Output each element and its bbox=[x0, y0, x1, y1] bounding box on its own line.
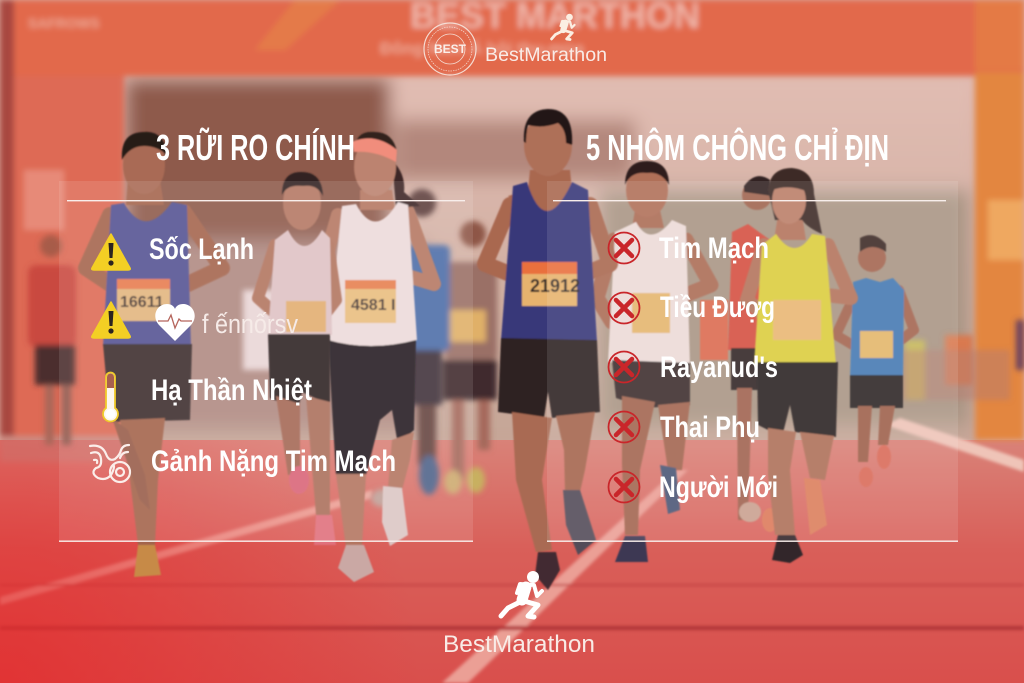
runner: white vest centre right bbox=[597, 161, 711, 562]
seal badge: BEST bbox=[434, 42, 467, 56]
icon: cross 3 bbox=[608, 352, 640, 382]
heading: contraindications: 5 NHÔM CHÔNG CHỈ ĐỊN bbox=[586, 126, 889, 168]
icon: heart with pulse bbox=[155, 304, 195, 341]
text: pregnancy: Thai Phụ bbox=[660, 411, 760, 444]
icon: warning triangle 2 bbox=[92, 302, 130, 338]
runner: main navy vest bbox=[485, 109, 610, 590]
top wordmark: BestMarathon bbox=[485, 45, 607, 66]
text: beginners: Người Mới bbox=[659, 471, 778, 504]
heading: risks: 3 RỮI RO CHÍNH bbox=[156, 126, 355, 168]
icon: cardiovascular curls bbox=[90, 445, 130, 482]
icon: cross 2 bbox=[608, 292, 640, 324]
background photo: finish gate and track: Đông Nam Á hội thu-mùa bbox=[380, 39, 585, 58]
panel: risks bbox=[59, 181, 473, 542]
icon: cross 1 bbox=[608, 232, 640, 264]
runner: blue vest right bbox=[836, 235, 914, 487]
panel: contraindications bbox=[547, 181, 958, 542]
runner: main navy vest: 21912 bbox=[530, 276, 580, 296]
icon: thermometer bbox=[103, 372, 118, 422]
distant runners bbox=[28, 189, 1024, 507]
text: heart strain: Gảnh Nặng Tim Mạch bbox=[151, 445, 396, 478]
runner: blue vest left bbox=[86, 132, 222, 577]
background photo: finish gate and track: SAFROWS bbox=[28, 15, 100, 31]
runner: pale vest woman bbox=[258, 172, 336, 545]
logo: top seal and wordmark bbox=[424, 14, 607, 75]
text: hypothermia: Hạ Thần Nhiệt bbox=[151, 374, 312, 407]
runner: yellow vest bbox=[747, 168, 851, 563]
text: cold shock: Sốc Lạnh bbox=[149, 233, 254, 266]
text: cardiac: Tim Mạch bbox=[659, 232, 769, 265]
runner: blue vest left: 16611 bbox=[120, 294, 164, 311]
bottom wordmark: BestMarathon bbox=[443, 631, 595, 658]
runner: white vest woman bbox=[314, 132, 434, 582]
runner: red vest behind bbox=[700, 176, 778, 532]
seal badge bbox=[424, 23, 476, 75]
runner: white vest woman: 4581 I bbox=[351, 297, 395, 314]
logo: bottom runner and wordmark bbox=[443, 571, 595, 658]
icon: cross 5 bbox=[608, 472, 640, 502]
text: diabetes: Tiều Đượg bbox=[660, 291, 775, 324]
icon: cross 4 bbox=[608, 412, 640, 442]
text: Raynaud: Rayanud's bbox=[660, 351, 778, 384]
icon: warning triangle 1 bbox=[92, 234, 130, 270]
icon: bottom runner bbox=[501, 571, 542, 617]
icon: top runner bbox=[552, 14, 575, 40]
text: garbled label: f ếnnốrsv bbox=[202, 309, 298, 339]
